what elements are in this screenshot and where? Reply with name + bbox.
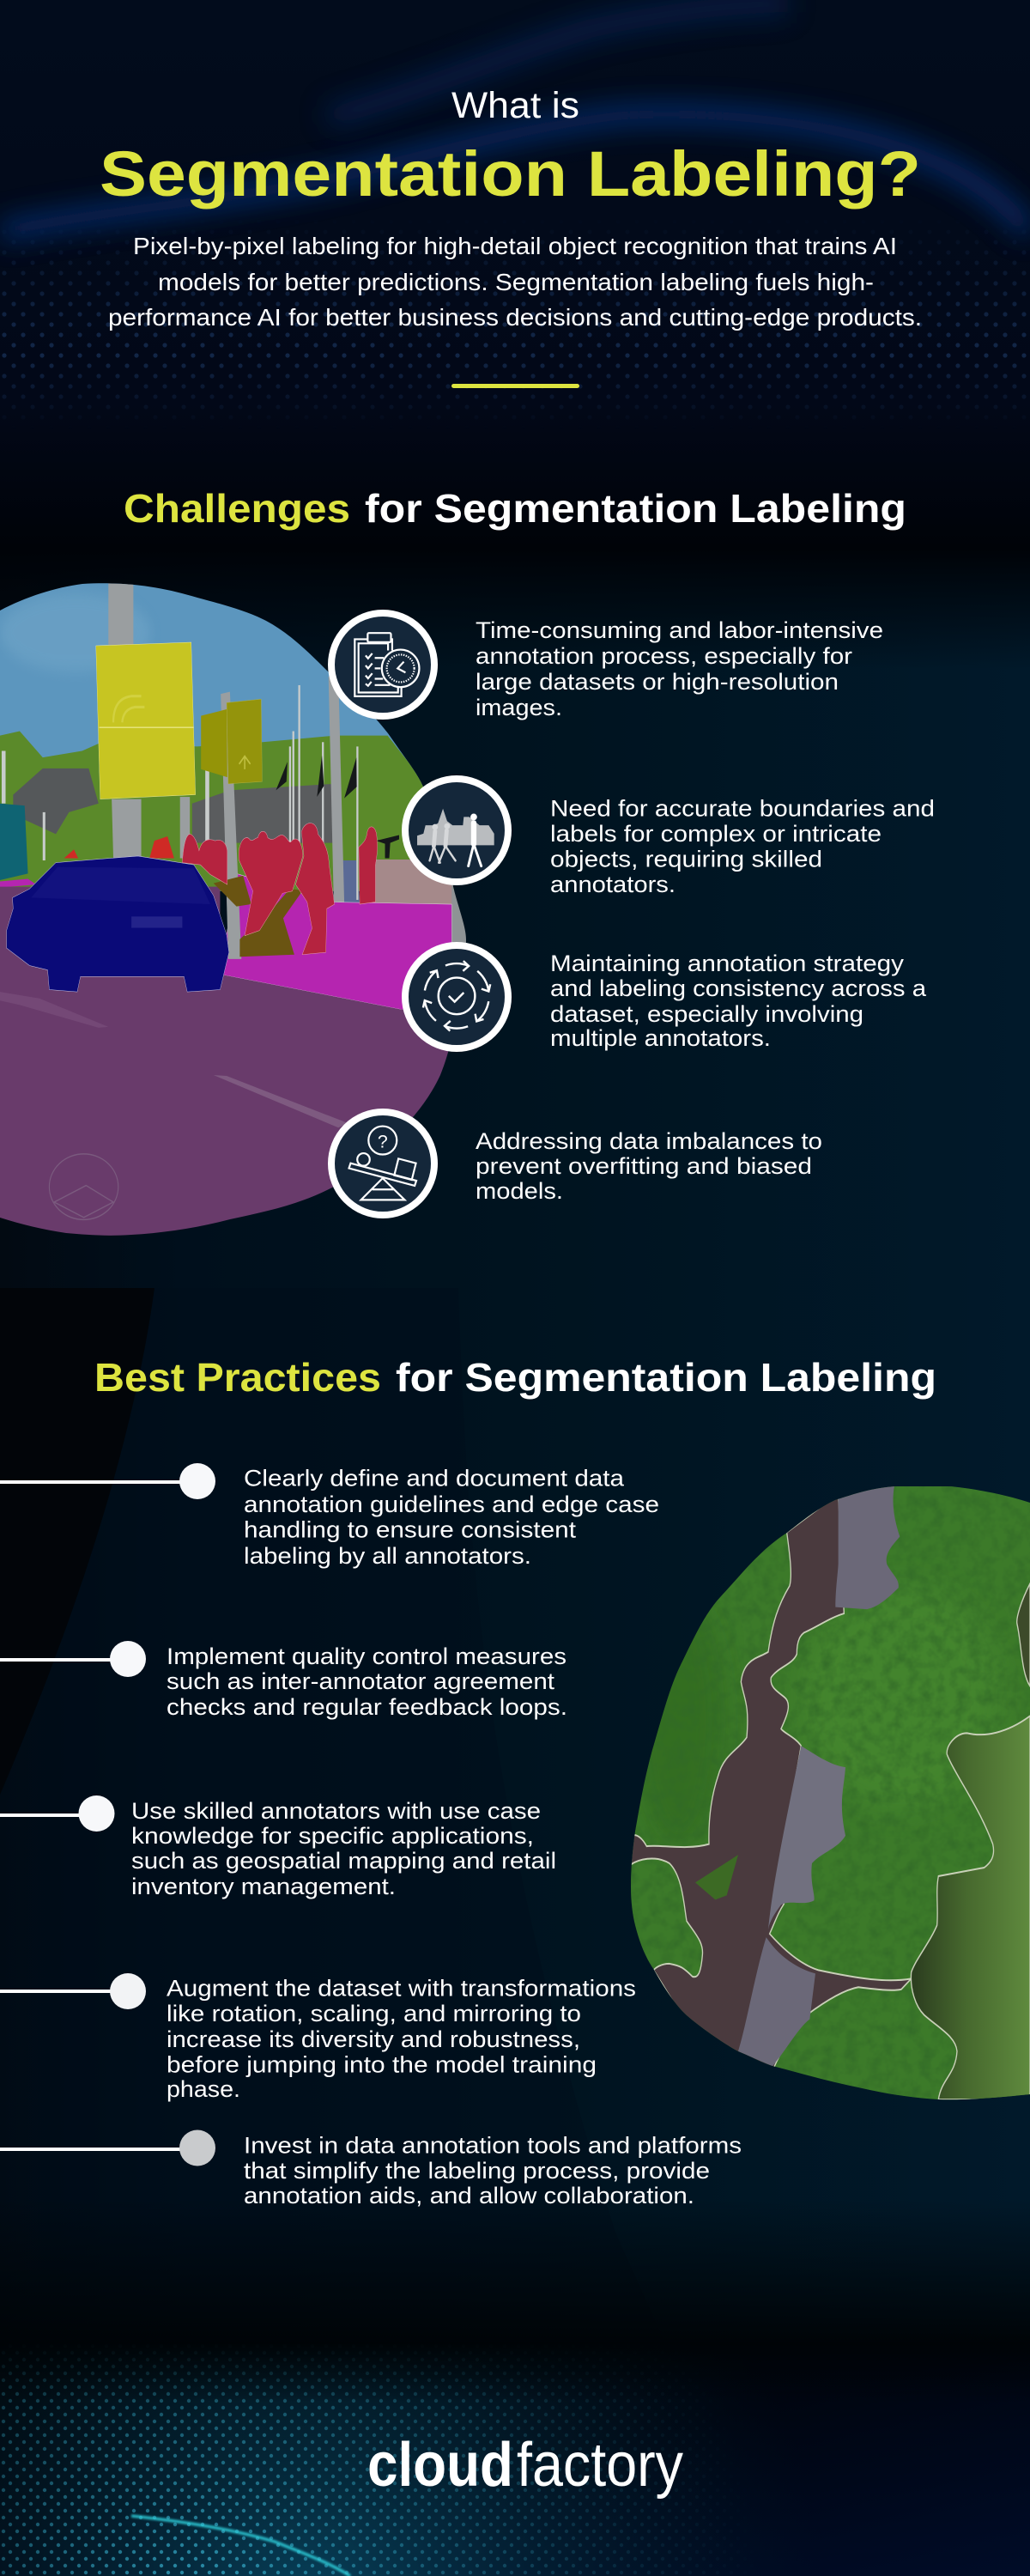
best practice 3 marker [0,1795,115,1832]
challenge 2 text: labels for complex or intricate [550,821,882,847]
best practice 5 text [244,2133,742,2208]
challenge icons [331,613,508,1215]
icon: clipboard with clock [331,613,434,716]
challenge 2 text: annotators. [550,872,676,897]
car [7,856,229,992]
best practice 5 text: that simplify the labeling process, provide [244,2158,710,2184]
challenge 4 text: prevent overfitting and biased [476,1153,812,1179]
grey buildings [13,769,99,834]
people [182,823,378,955]
best practice 5 text: Invest in data annotation tools and platforms [244,2133,742,2159]
best practice 4 text: like rotation, scaling, and mirroring to [167,2001,581,2026]
best practice 1 text: annotation guidelines and edge case [244,1492,659,1517]
grey wall [451,884,466,943]
heading: challenges [124,486,906,531]
heading: best practices: Best Practices [94,1355,381,1400]
best practice 1 text [244,1465,659,1569]
challenge 1 text: images. [476,695,562,720]
best practice 1 text: Clearly define and document data [244,1465,625,1491]
challenge 1 text: Time-consuming and labor-intensive [476,617,883,643]
challenge 1 text: annotation process, especially for [476,643,852,669]
best practice 1 text: handling to ensure consistent [244,1516,577,1542]
best practice 4 text: phase. [167,2076,240,2102]
challenge 2 text: objects, requiring skilled [550,847,822,872]
water [835,1481,900,1609]
best practice 4 text: Augment the dataset with transformations [167,1975,636,2001]
heading: challenges: for Segmentation Labeling [365,486,906,531]
best practice 2 text: such as inter-annotator agreement [167,1668,555,1694]
divider [451,384,579,388]
challenge 1 text [476,617,883,720]
best practice 3 text [131,1798,556,1899]
challenge 3 text: and labeling consistency across a [550,975,927,1001]
best practice 3 text: such as geospatial mapping and retail [131,1848,556,1874]
icon: city skyline with pedestrians [405,779,508,882]
logo: cloudfactory [367,2431,683,2500]
open field [911,1716,1030,2099]
image: street scene segmentation [0,583,466,1236]
challenge 3 text [550,951,927,1051]
best practice 1 marker [0,1463,215,1499]
brown dog [239,889,303,957]
challenge 3 text: Maintaining annotation strategy [550,951,905,976]
magenta sidewalk [223,874,451,1010]
challenge 4 text: models. [476,1178,563,1204]
riverbank [629,1494,912,2070]
intro paragraph [108,233,922,331]
traffic lights [201,709,227,777]
intro paragraph: Pixel-by-pixel labeling for high-detail object recognition that trains AI [133,233,897,259]
image: aerial forest segmentation [627,1481,1030,2104]
intro paragraph: models for better predictions. Segmentation labeling fuels high- [158,269,874,295]
poles [108,584,344,959]
logo: cloudfactory: cloud [367,2431,513,2500]
tree canopy [627,1481,1030,2104]
tan pavement [371,860,453,905]
best practice 4 marker [0,1973,146,2009]
best practice 3 text: knowledge for specific applications, [131,1823,534,1849]
best practice 5 marker [0,2129,215,2166]
footer dot wave decoration [0,2342,1030,2576]
best practice 2 text [167,1643,567,1720]
best practice 3 text: inventory management. [131,1874,396,1899]
challenge 3 text: multiple annotators. [550,1025,771,1051]
green hills [0,732,473,891]
title: Segmentation Labeling?: Segmentation Labeling? [100,138,921,210]
title: What is: What is [451,85,579,126]
best practice 2 text: checks and regular feedback loops. [167,1694,567,1720]
icon: cycle of arrows around check [405,945,508,1048]
teal bus [0,804,28,880]
best practice 2 marker [0,1641,146,1677]
best practice 4 text: increase its diversity and robustness, [167,2026,580,2052]
heading: challenges: Challenges [124,486,350,531]
best practice 3 text: Use skilled annotators with use case [131,1798,541,1824]
challenge 3 text: dataset, especially involving [550,1001,863,1027]
icon: unbalanced scale with question mark: ? [378,1131,388,1151]
best practice 2 text: Implement quality control measures [167,1643,566,1669]
road [0,886,448,1236]
sky [0,583,455,891]
logo: cloudfactory: factory [517,2431,683,2500]
header wave and dot decoration [0,3,1030,429]
heading: best practices [94,1355,936,1400]
challenge 4 text: Addressing data imbalances to [476,1128,822,1154]
black flags [276,756,399,858]
challenge 2 text: Need for accurate boundaries and [550,795,935,821]
best practice 5 text: annotation aids, and allow collaboration. [244,2183,694,2208]
best practice 1 text: labeling by all annotators. [244,1543,531,1569]
best practice 4 text: before jumping into the model training [167,2052,597,2078]
challenge 4 text [476,1128,822,1204]
icon: unbalanced scale with question mark [331,1112,434,1215]
challenge 1 text: large datasets or high-resolution [476,669,839,695]
best practice 4 text [167,1975,636,2102]
yellow sign [96,642,196,799]
challenge 2 text [550,795,935,897]
intro paragraph: performance AI for better business decisions and cutting-edge products. [108,304,922,331]
heading: best practices: for Segmentation Labeling [396,1355,936,1400]
